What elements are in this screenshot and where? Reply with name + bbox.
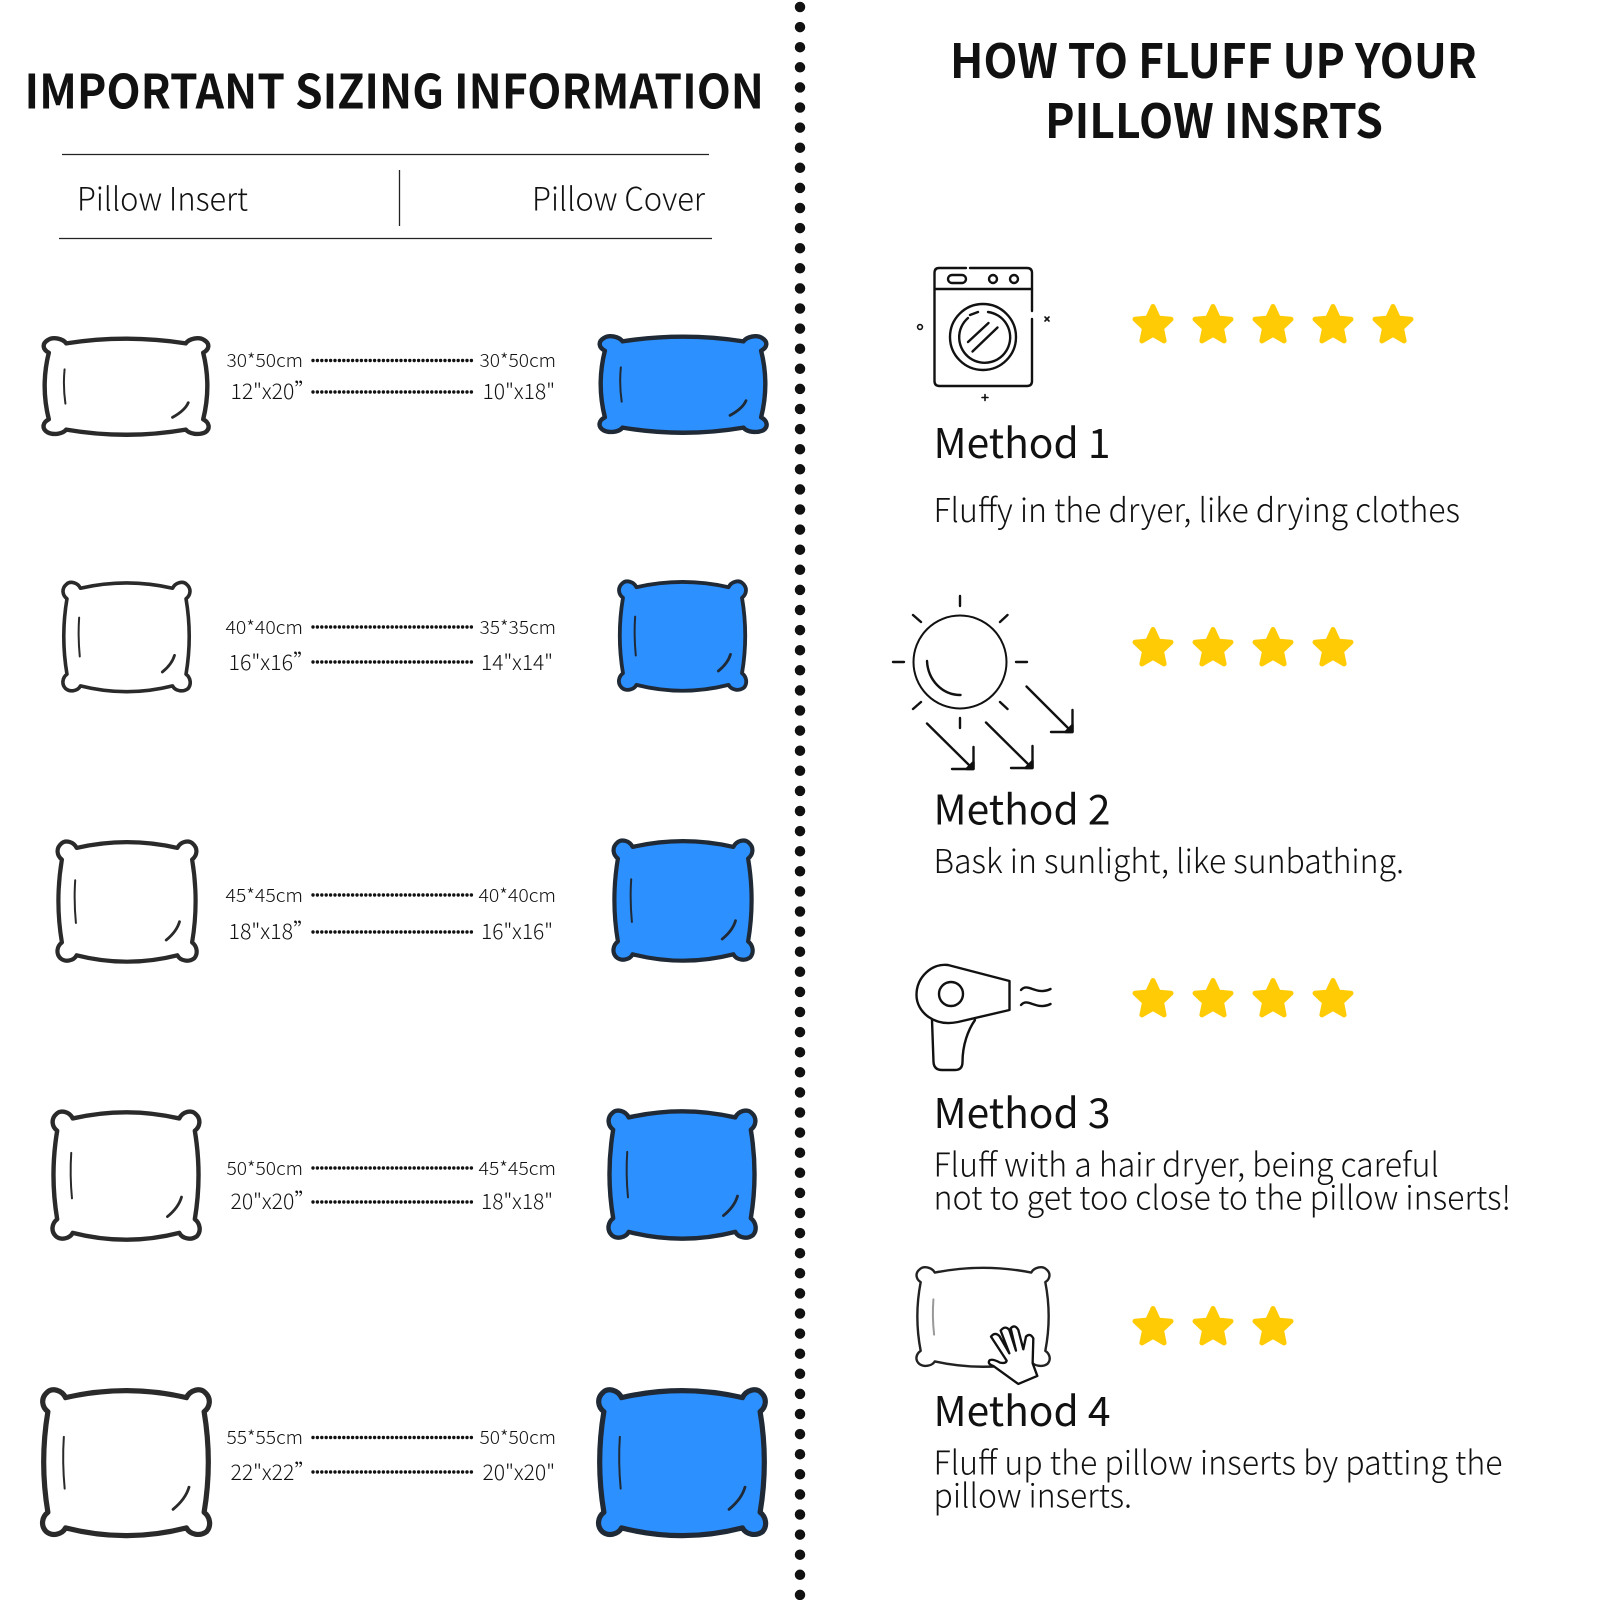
size labels 5: 22"x22” — [230, 1456, 316, 1487]
pillow cover 3 — [613, 841, 753, 961]
heading: important sizing information: IMPORTANT SIZING INFORMATION — [24, 54, 764, 122]
size labels 1: 10"x18" — [482, 375, 555, 406]
icon: washing machine dryer — [918, 268, 1049, 400]
method 4 description: pillow inserts. — [934, 1470, 1132, 1518]
size row 2 — [63, 581, 746, 692]
method 3 description: Fluff with a hair dryer, being careful — [934, 1138, 1439, 1186]
table header: pillow insert and pillow cover: Pillow Insert — [77, 174, 248, 220]
size labels 4: 50*50cm — [226, 1155, 303, 1181]
size labels 4 — [226, 1155, 556, 1216]
size labels 5: 20"x20" — [482, 1456, 555, 1487]
heading: how to fluff up your pillow insrts: HOW TO FLUFF UP YOUR — [950, 23, 1477, 92]
icon: pillow with patting hand — [916, 1267, 1050, 1384]
size labels 4: 45*45cm — [478, 1155, 556, 1181]
size labels 5: 50*50cm — [480, 1424, 556, 1450]
vertical dotted divider — [795, 7, 805, 1600]
size labels 3 — [226, 882, 556, 946]
pillow cover 2 — [619, 581, 746, 691]
method 2 title: Method 2 — [934, 776, 1110, 836]
size row 3 — [57, 841, 753, 962]
method 2 — [893, 596, 1404, 883]
method 1 — [918, 268, 1460, 532]
size labels 4: 20"x20” — [230, 1185, 316, 1216]
icon: sun with arrows — [893, 596, 1072, 769]
rating: five stars — [1135, 306, 1411, 341]
size labels 5 — [226, 1424, 556, 1487]
size labels 1: 12"x20” — [230, 375, 316, 406]
method 3 description — [934, 1138, 1511, 1220]
method 3 — [916, 965, 1511, 1220]
size labels 3: 40*40cm — [478, 882, 556, 908]
icon: hair dryer — [916, 965, 1050, 1070]
size labels 1 — [226, 347, 556, 406]
size labels 1: 30*50cm — [226, 347, 303, 373]
pillow cover 1 — [600, 336, 767, 433]
pillow insert 1 — [44, 338, 209, 435]
heading: how to fluff up your pillow insrts: PILLOW INSRTS — [1045, 83, 1383, 152]
pillow cover 4 — [608, 1111, 756, 1239]
size row 5 — [43, 1390, 766, 1536]
method 4 description — [934, 1436, 1502, 1518]
method 4 title: Method 4 — [934, 1378, 1110, 1438]
size labels 3: 16"x16" — [481, 915, 553, 946]
method 3 description: not to get too close to the pillow inserts! — [934, 1172, 1511, 1220]
pillow cover 5 — [599, 1390, 766, 1536]
method 1 description: Fluffy in the dryer, like drying clothes — [934, 484, 1460, 532]
rating: four stars — [1135, 630, 1351, 664]
size labels 1: 30*50cm — [480, 347, 556, 373]
size row 1 — [44, 336, 767, 435]
heading: how to fluff up your pillow insrts — [950, 23, 1477, 152]
pillow insert 4 — [52, 1112, 200, 1240]
table header: pillow insert and pillow cover — [59, 154, 712, 238]
table header: pillow insert and pillow cover: Pillow Cover — [532, 174, 705, 220]
size labels 2: 16"x16” — [228, 646, 314, 677]
panel: sizing information — [24, 54, 767, 1536]
pillow insert 3 — [57, 842, 197, 962]
method 3 title: Method 3 — [934, 1080, 1110, 1140]
size labels 3: 45*45cm — [226, 882, 303, 908]
panel: how to fluff — [893, 23, 1511, 1518]
pillow insert 2 — [63, 582, 190, 692]
method 2 description: Bask in sunlight, like sunbathing. — [934, 835, 1404, 883]
size labels 2: 40*40cm — [226, 614, 303, 640]
method 4 — [916, 1267, 1502, 1518]
size labels 5: 55*55cm — [226, 1424, 303, 1450]
method 4 description: Fluff up the pillow inserts by patting the — [934, 1436, 1502, 1484]
size labels 2 — [226, 614, 556, 677]
size labels 4: 18"x18" — [481, 1185, 553, 1216]
size labels 2: 14"x14" — [481, 646, 553, 677]
rating: four stars — [1135, 980, 1351, 1015]
rating: three stars — [1135, 1308, 1291, 1343]
size labels 3: 18"x18” — [228, 915, 314, 946]
method 1 title: Method 1 — [934, 410, 1110, 470]
size labels 2: 35*35cm — [480, 614, 556, 640]
pillow insert 5 — [43, 1390, 210, 1536]
size row 4 — [52, 1111, 756, 1240]
